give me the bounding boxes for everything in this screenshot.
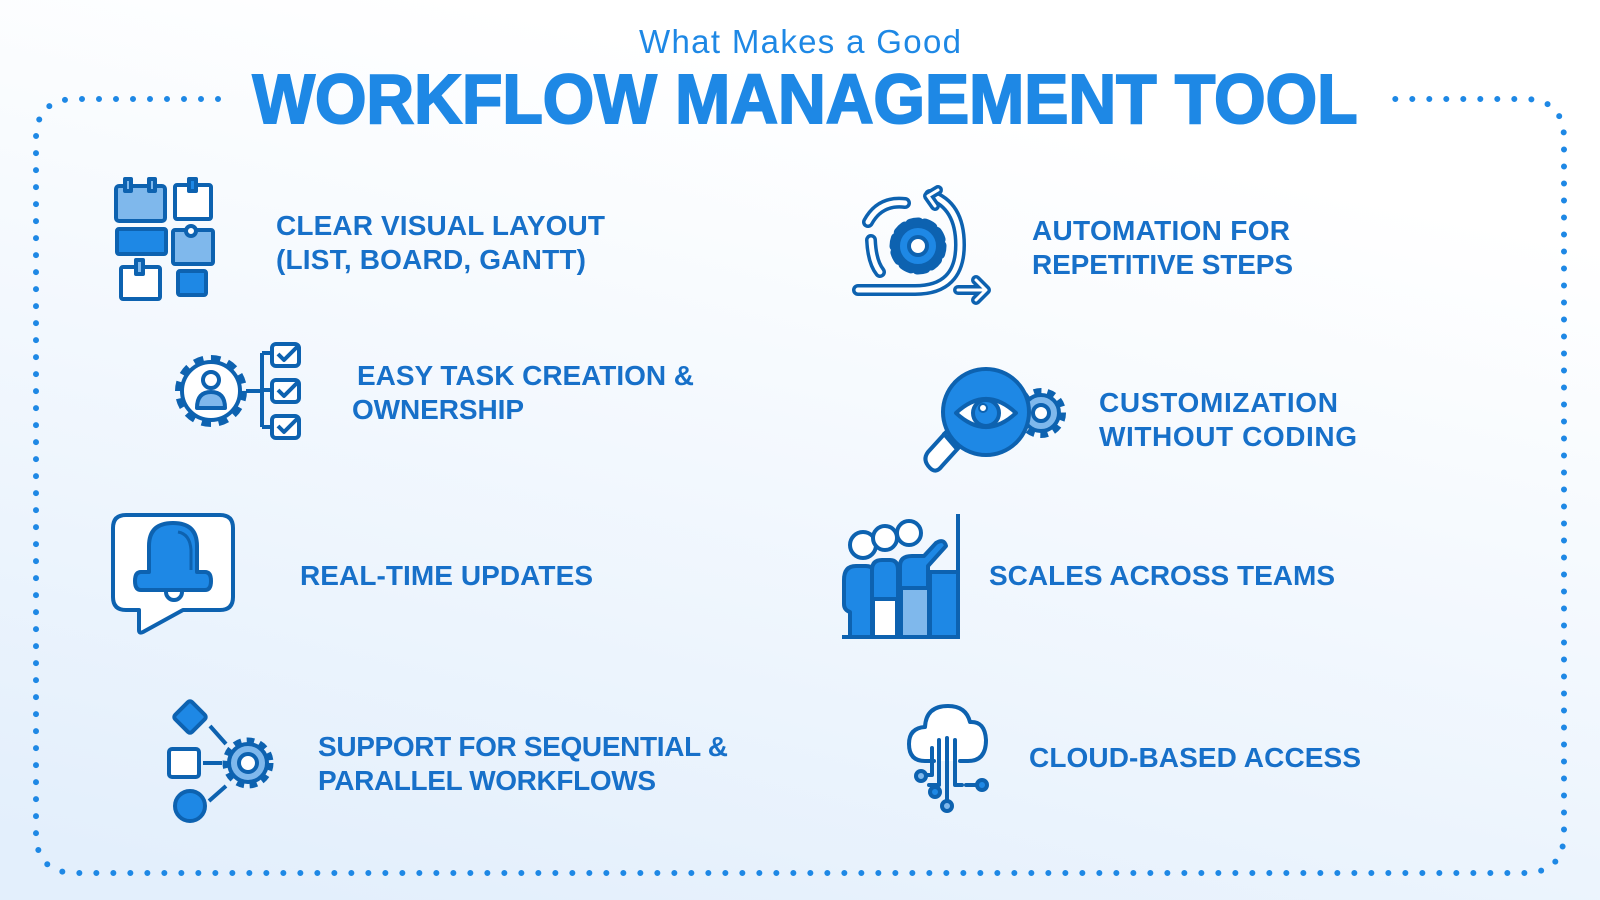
label: real-time updates: REAL-TIME UPDATES [300, 560, 593, 591]
label: customization: CUSTOMIZATION [1099, 387, 1338, 418]
icon: bell notification [113, 515, 233, 633]
label: task creation [352, 360, 694, 425]
label: customization: WITHOUT CODING [1099, 421, 1357, 452]
icon: layout boards [116, 179, 213, 299]
label: cloud access: CLOUD-BASED ACCESS [1029, 742, 1361, 773]
label: clear visual layout: (LIST, BOARD, GANTT) [276, 244, 586, 275]
label: automation [1032, 215, 1293, 280]
label: clear visual layout: CLEAR VISUAL LAYOUT [276, 210, 605, 241]
label: task creation: EASY TASK CREATION & [357, 360, 694, 391]
label: clear visual layout [276, 210, 605, 275]
icon: automation cycle [858, 190, 986, 300]
subtitle: What Makes a Good [639, 23, 961, 60]
icon: magnifier customization [925, 369, 1061, 471]
icon: workflow sequence [169, 700, 269, 821]
label: automation: AUTOMATION FOR [1032, 215, 1290, 246]
icon: cloud [909, 706, 987, 811]
label: automation: REPETITIVE STEPS [1032, 249, 1293, 280]
title: WORKFLOW MANAGEMENT TOOL [252, 60, 1358, 138]
label: customization [1099, 387, 1357, 452]
label: sequential workflows: PARALLEL WORKFLOWS [318, 765, 656, 796]
label: sequential workflows [318, 731, 728, 796]
label: scales across teams: SCALES ACROSS TEAMS [989, 560, 1335, 591]
label: sequential workflows: SUPPORT FOR SEQUENTIAL & [318, 731, 728, 762]
icon: task creation [180, 344, 299, 438]
icon: team scaling [842, 514, 960, 637]
label: task creation: OWNERSHIP [352, 394, 524, 425]
